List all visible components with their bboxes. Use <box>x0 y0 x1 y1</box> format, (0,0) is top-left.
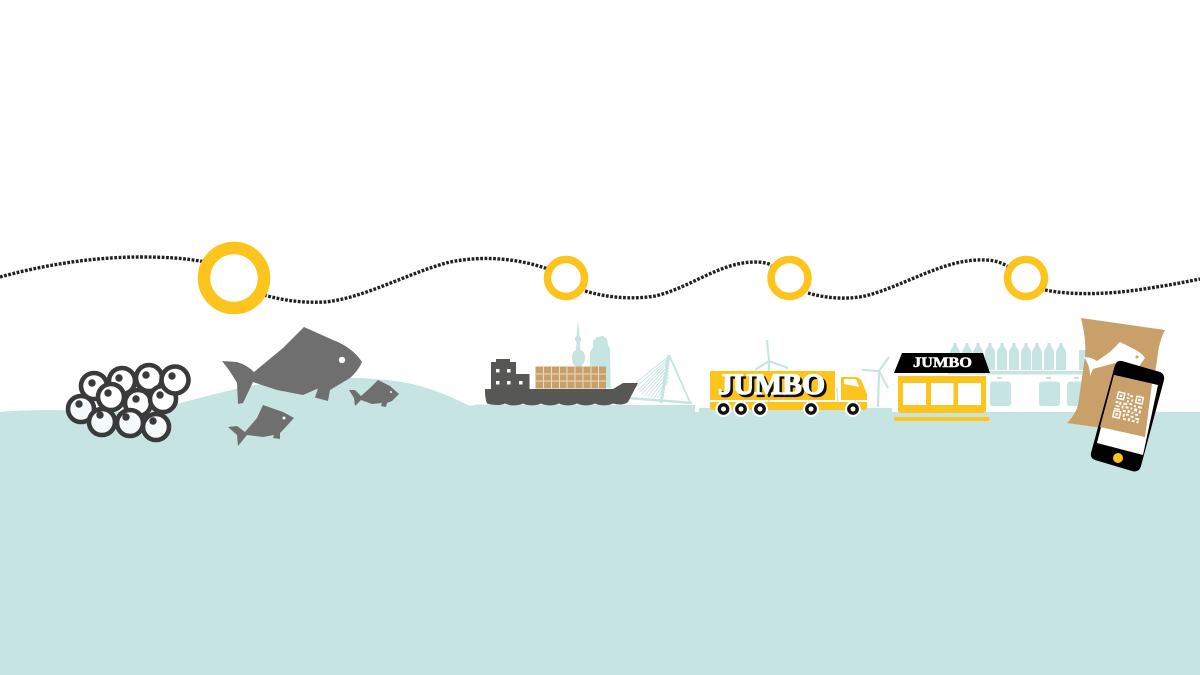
QR code <box>1112 391 1144 423</box>
white fish on bag <box>1084 342 1145 376</box>
background: wind turbines <box>755 340 889 407</box>
milestone ring 3 <box>771 260 808 296</box>
truck logo: JUMBO <box>720 370 828 404</box>
truck logo: JUMBO <box>718 368 825 401</box>
icon: container ship <box>485 359 638 405</box>
background: shelf with bottles and jars <box>948 343 1090 406</box>
icon: Jumbo truck <box>710 368 867 416</box>
icon: large fish <box>222 327 362 404</box>
background: Erasmus bridge <box>627 355 692 403</box>
icon: medium fish <box>228 405 294 446</box>
dotted journey line <box>0 257 1200 302</box>
icon: fish feed bag <box>1067 318 1165 434</box>
icon: Jumbo store <box>894 353 990 421</box>
ship hull and bridge <box>485 359 638 405</box>
background skyline: tower and building <box>572 320 611 388</box>
water with hill <box>0 378 1200 675</box>
ship cargo containers <box>536 366 606 388</box>
icon: small fish <box>349 380 399 407</box>
milestone ring 4 <box>1008 260 1044 296</box>
milestone ring 1 <box>204 248 264 308</box>
store logo: JUMBO <box>913 355 972 371</box>
milestone ring 2 <box>548 260 584 296</box>
icon: smartphone with QR code <box>1091 361 1164 471</box>
truck wheels <box>717 402 860 416</box>
icon: fish eggs <box>68 365 188 440</box>
